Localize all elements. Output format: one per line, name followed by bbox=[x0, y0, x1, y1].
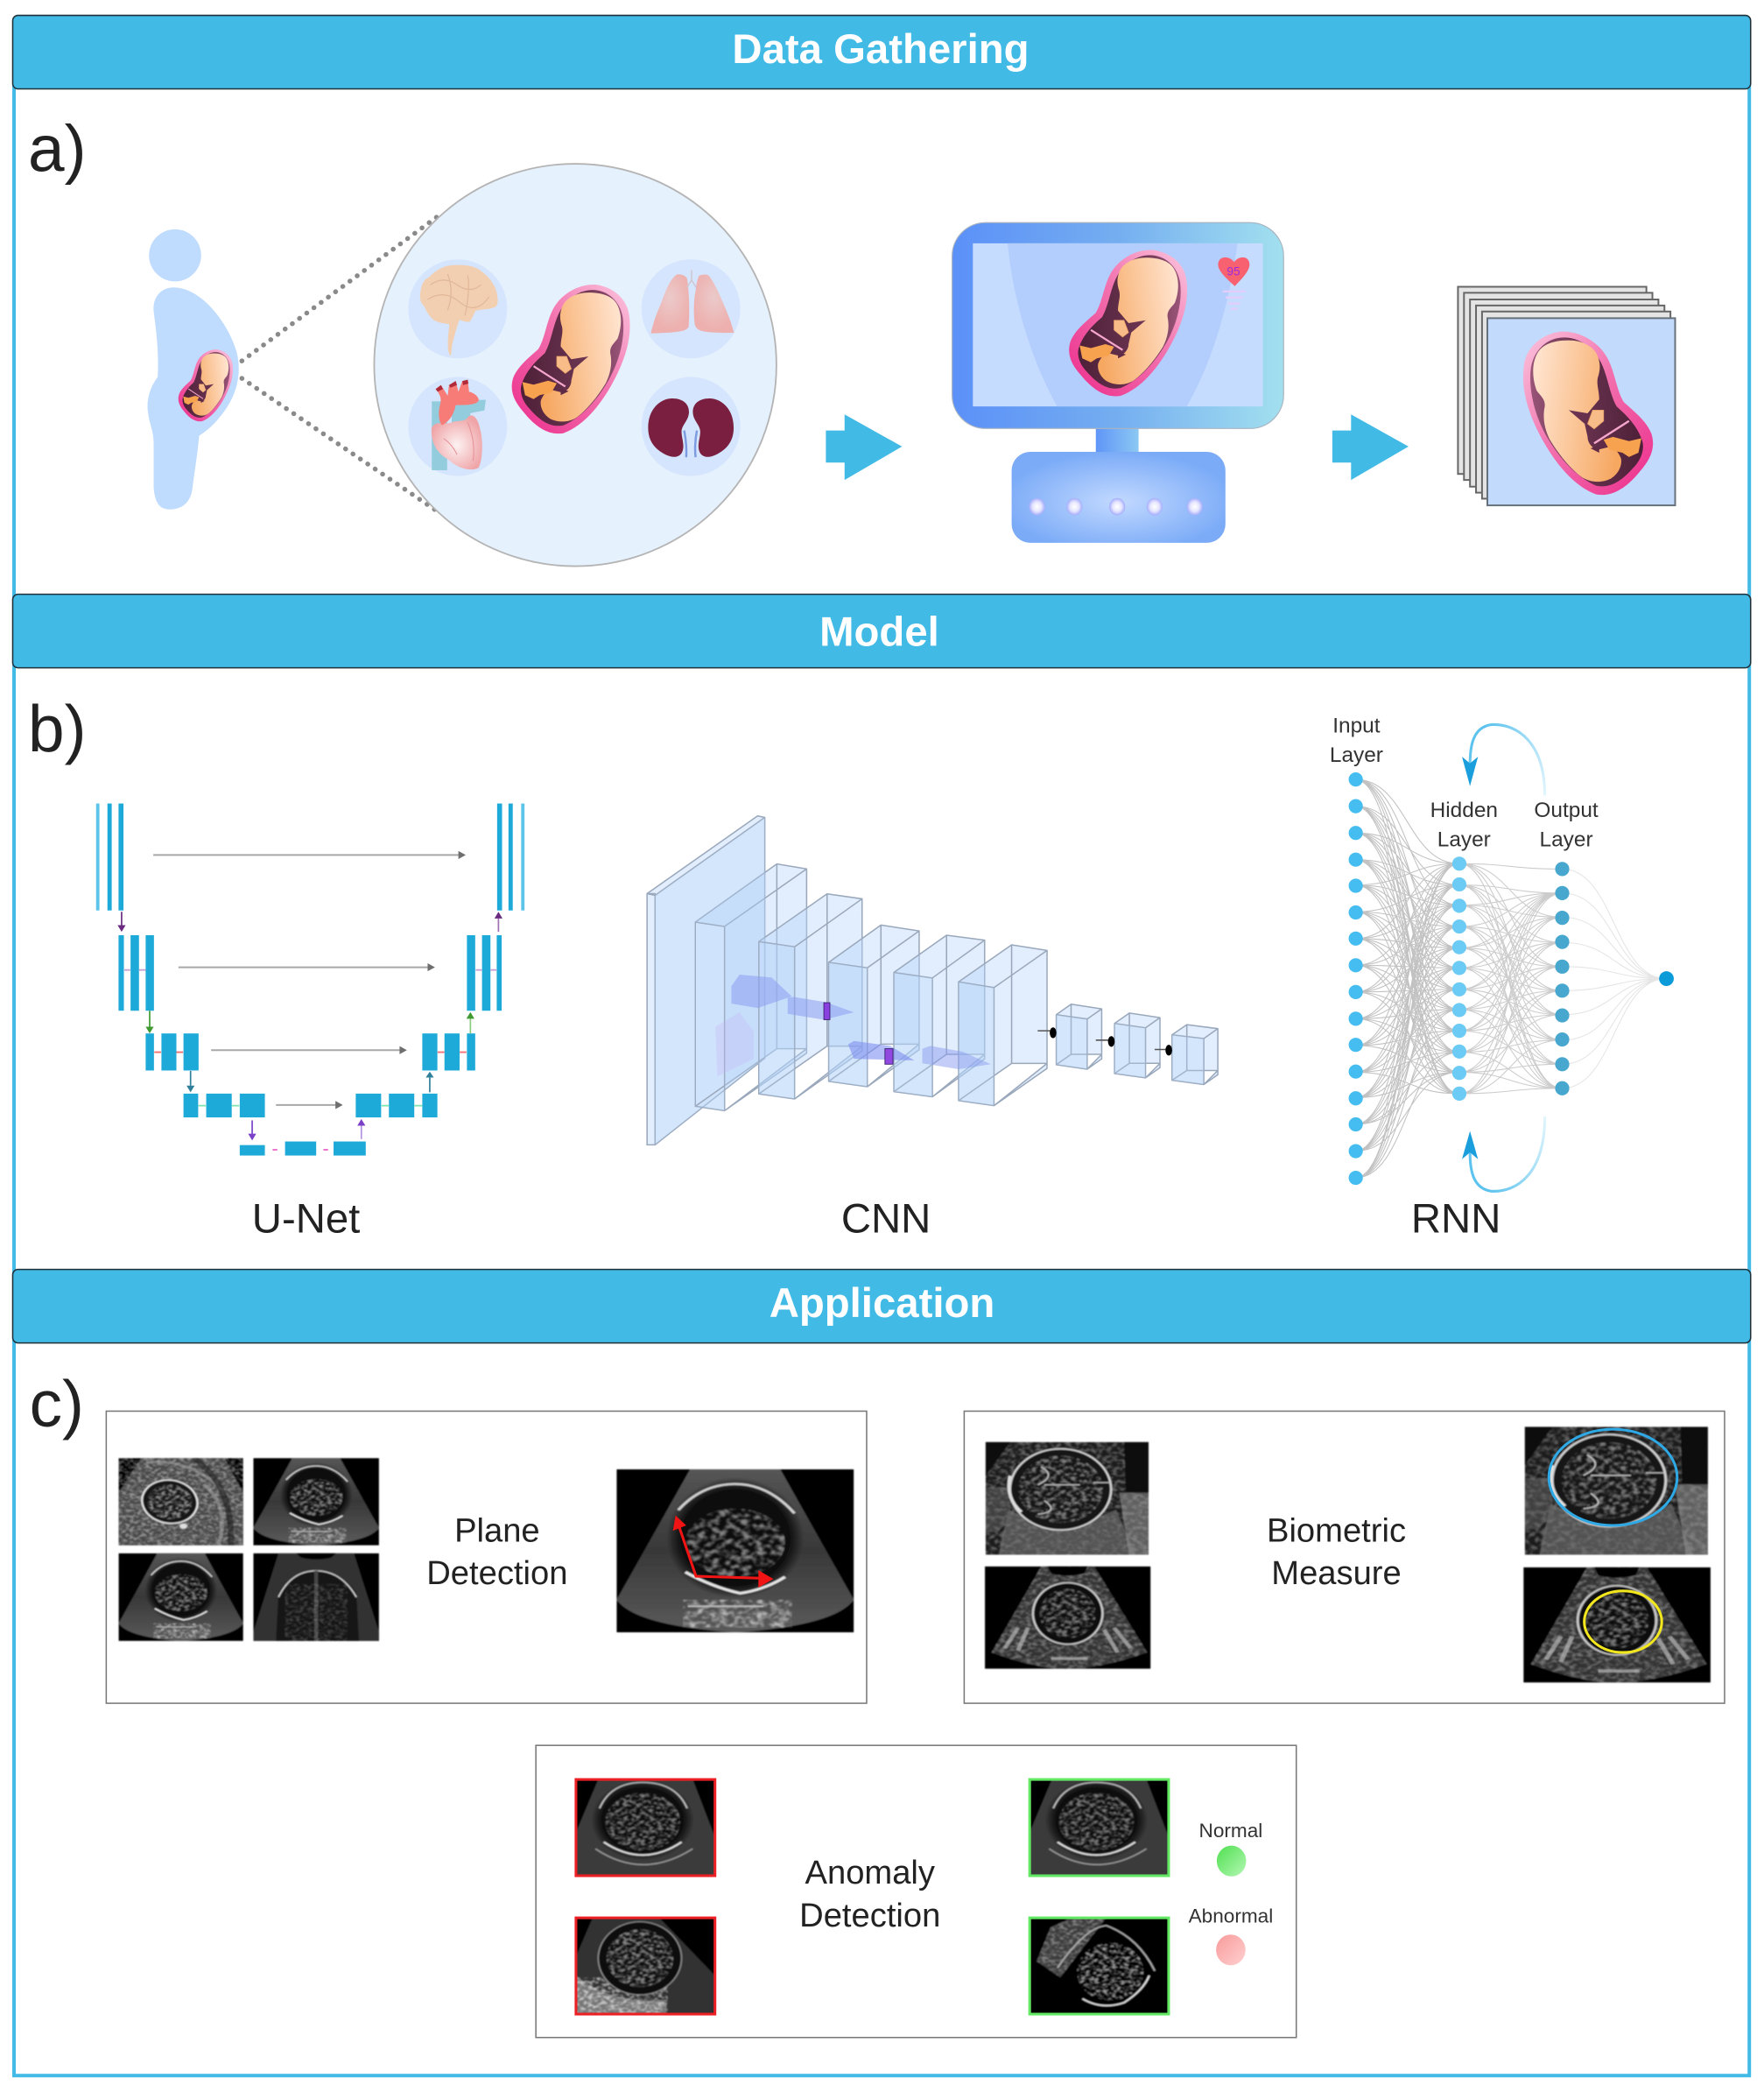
panel: plane detection bbox=[106, 1411, 867, 1703]
measured ring scan bbox=[1523, 1567, 1711, 1682]
recurrent loop bottom bbox=[1462, 1116, 1545, 1191]
console lights bbox=[1029, 498, 1203, 516]
panel label b: b) bbox=[28, 692, 87, 765]
feature kernels bbox=[715, 975, 991, 1076]
icon: heart bbox=[408, 377, 507, 476]
layer labels: Hidden bbox=[1430, 799, 1498, 822]
header: Model: Model bbox=[819, 609, 939, 655]
dense block 2 bbox=[1114, 1013, 1160, 1078]
hidden nodes bbox=[1452, 856, 1466, 1101]
hidden to output connections bbox=[1459, 863, 1562, 1094]
measured head scan bbox=[1525, 1426, 1708, 1554]
dense block 3 bbox=[1172, 1025, 1218, 1085]
layer labels: Layer bbox=[1437, 828, 1491, 851]
dotted zoom lines bbox=[242, 214, 441, 512]
plane detection label: Plane bbox=[454, 1511, 540, 1549]
diagram: CNN bbox=[647, 816, 1218, 1243]
heart rate: 95 bbox=[1226, 265, 1240, 278]
panel: biometric measure bbox=[964, 1411, 1725, 1703]
plane detection label: Detection bbox=[426, 1554, 567, 1592]
image stack bbox=[1458, 286, 1675, 505]
panel label a: a) bbox=[28, 111, 87, 185]
dense block 1 bbox=[1057, 1004, 1101, 1069]
heart rate bbox=[1218, 257, 1249, 309]
input plate bbox=[647, 816, 765, 1145]
diagram: U-Net bbox=[96, 804, 524, 1243]
biometric label bbox=[1267, 1511, 1406, 1592]
conv block 5 bbox=[959, 945, 1047, 1106]
RNN label: RNN bbox=[1411, 1196, 1500, 1243]
layer labels: Output bbox=[1534, 799, 1599, 822]
header: Application: Application bbox=[770, 1280, 994, 1327]
conv block 2 bbox=[759, 894, 862, 1099]
U-Net label: U-Net bbox=[252, 1196, 360, 1243]
zoom circle with organs bbox=[374, 164, 777, 567]
biometric label: Biometric bbox=[1267, 1511, 1406, 1549]
abnormal scans bbox=[576, 1779, 715, 2014]
icon: lungs bbox=[642, 259, 741, 358]
icon: fetus in uterus bbox=[512, 285, 630, 433]
arrow: to image stack bbox=[1332, 414, 1409, 480]
biometric label: Measure bbox=[1271, 1554, 1402, 1592]
final node bbox=[1659, 971, 1674, 986]
header: Data Gathering: Data Gathering bbox=[732, 26, 1030, 73]
red axis arrows bbox=[673, 1516, 773, 1588]
panel: application bbox=[30, 1367, 1725, 2038]
output nodes bbox=[1555, 862, 1570, 1095]
normal scans bbox=[1030, 1779, 1169, 2014]
output to final connections bbox=[1562, 869, 1667, 1088]
icon: brain bbox=[408, 259, 507, 358]
legend: Normal bbox=[1199, 1820, 1262, 1842]
layer labels: Layer bbox=[1540, 828, 1593, 851]
input nodes bbox=[1349, 772, 1363, 1185]
icon: kidneys bbox=[642, 377, 741, 476]
layer labels: Layer bbox=[1330, 743, 1383, 767]
console base bbox=[1012, 452, 1226, 543]
header: Application bbox=[13, 1270, 1751, 1343]
icon: pregnant woman bbox=[148, 229, 239, 510]
dense connectors bbox=[1037, 1027, 1172, 1055]
level connectors bbox=[124, 970, 496, 1150]
front faces bbox=[655, 817, 1204, 1145]
skip connections bbox=[153, 851, 466, 1109]
panel label c: c) bbox=[30, 1367, 84, 1440]
down and up arrows bbox=[117, 912, 502, 1140]
panel: model bbox=[28, 692, 1674, 1243]
ultrasound monitor bbox=[952, 222, 1283, 543]
CNN label: CNN bbox=[841, 1196, 931, 1243]
conv block 1 bbox=[695, 864, 806, 1110]
anomaly label bbox=[799, 1854, 940, 1934]
anomaly label: Anomaly bbox=[805, 1854, 935, 1891]
legend: Abnormal bbox=[1189, 1905, 1273, 1926]
panel: anomaly detection bbox=[536, 1745, 1297, 2038]
conv block 3 bbox=[829, 925, 919, 1087]
input scans bbox=[985, 1442, 1150, 1669]
layer labels bbox=[1330, 715, 1599, 851]
anomaly label: Detection bbox=[799, 1897, 940, 1934]
header: Model bbox=[13, 595, 1751, 668]
candidate scans bbox=[119, 1458, 379, 1641]
input to hidden connections bbox=[1355, 779, 1459, 1178]
conv block 4 bbox=[894, 935, 985, 1097]
detected plane scan bbox=[616, 1469, 854, 1632]
layer labels: Input bbox=[1332, 715, 1381, 738]
diagram: RNN bbox=[1330, 715, 1674, 1243]
recurrent loop top bbox=[1462, 724, 1545, 795]
arrow: to monitor bbox=[826, 414, 902, 480]
header: Data Gathering bbox=[13, 16, 1751, 89]
plane detection label bbox=[426, 1511, 567, 1592]
panel: data gathering bbox=[28, 111, 1675, 567]
legend bbox=[1189, 1820, 1273, 1965]
